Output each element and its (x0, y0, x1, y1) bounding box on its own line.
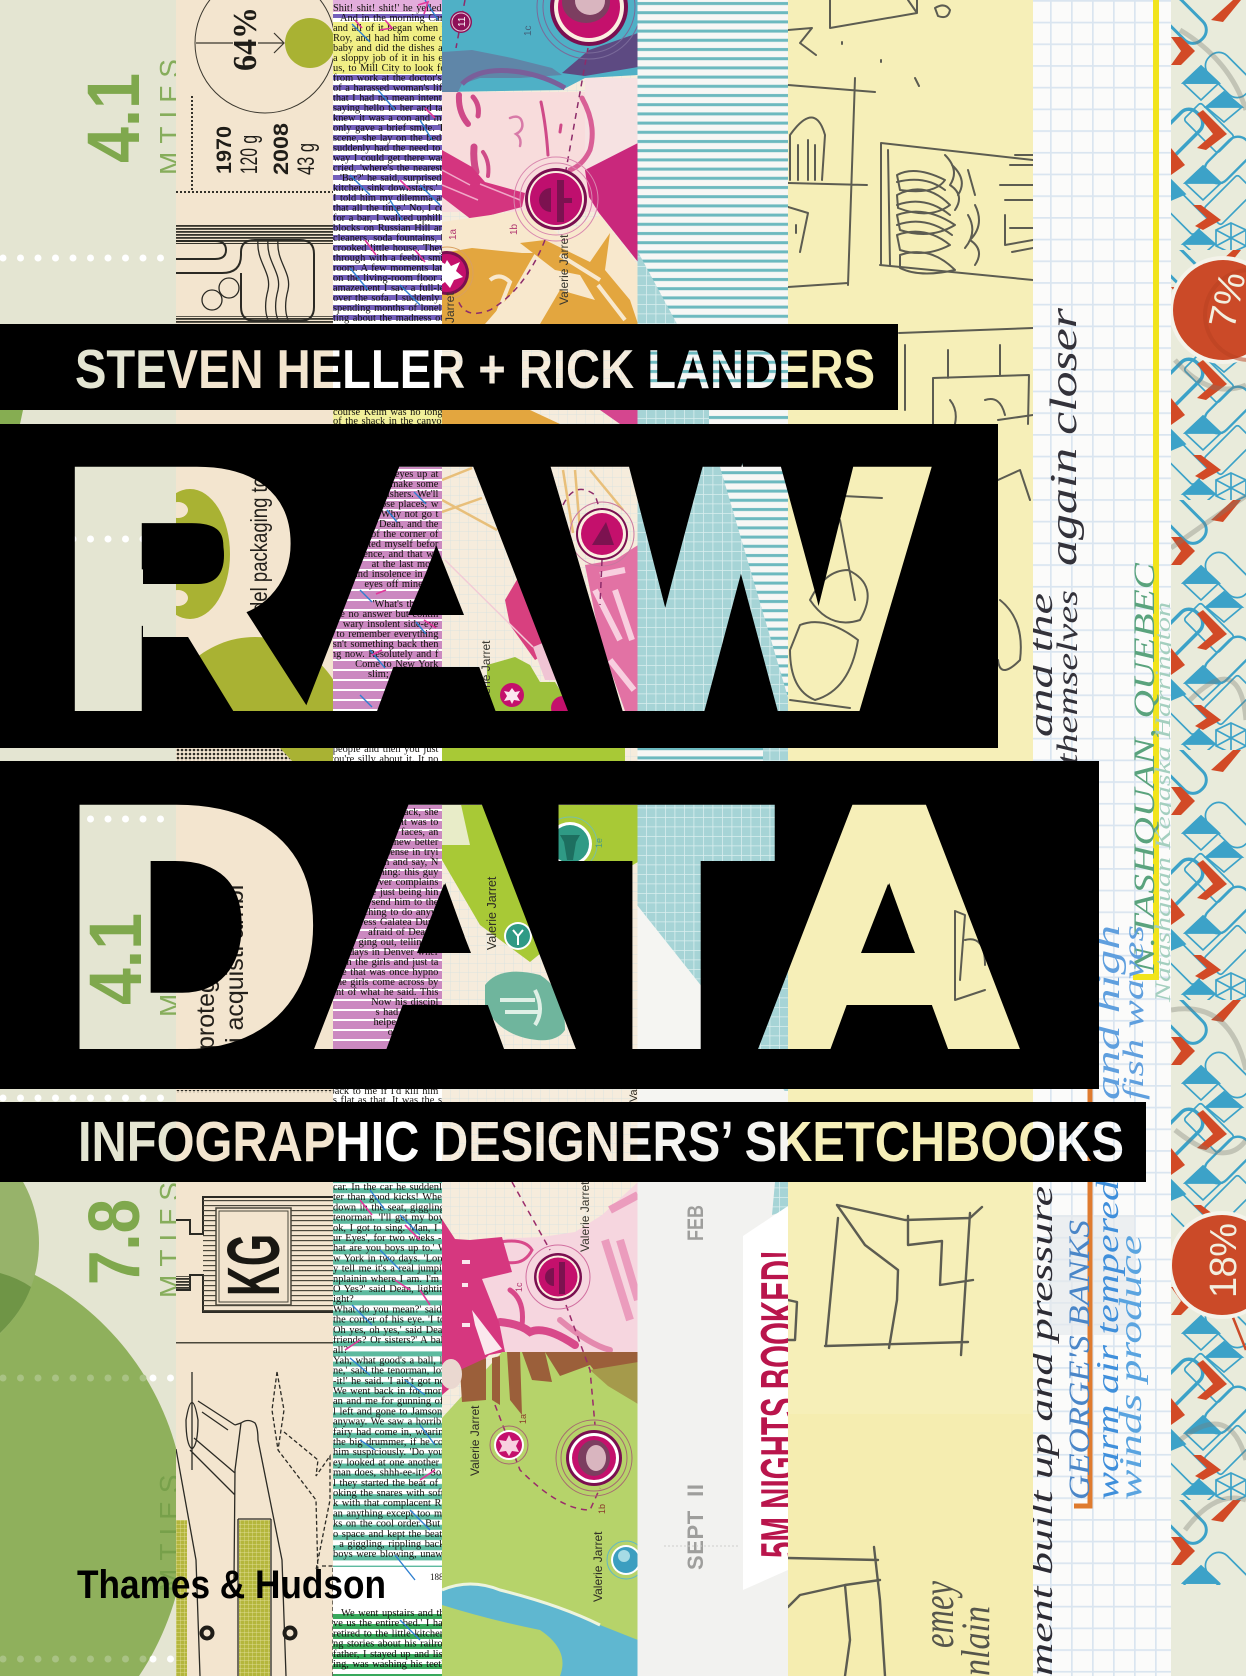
small labels top: 1b (509, 223, 520, 235)
shaded note patch (1049, 1215, 1135, 1335)
rotated label: FEB: FEB (683, 1205, 708, 1241)
chart: small green circle (0, 1182, 39, 1334)
highlights green (333, 1610, 442, 1676)
book text: top: saying hello to her and talkin (333, 103, 460, 114)
book text: middle: out of the corner of (354, 529, 439, 540)
book text: lower: k with that complacent Reich (333, 1498, 460, 1509)
book text: top: and all of it began when we d (333, 23, 463, 34)
book text: lower: Oh yes, oh yes,' said Dean. ' (333, 1325, 456, 1336)
illustration: striped book with glasses (176, 224, 333, 324)
book text: top: I told him my dilemma and h (333, 193, 461, 204)
book text: middle: send him to the (372, 897, 439, 908)
title line: DATA knock-out: A (321, 745, 570, 1109)
marker: small top-left: 11 (457, 16, 468, 27)
book text: middle: rlier days in Denver wher (328, 947, 439, 958)
grid wedge top (637, 250, 677, 324)
pencil sketch: lower plan (788, 1547, 885, 1676)
book text: top: scene, she lay on the bed sob (333, 133, 459, 144)
stat: 7.8: 7.8 (75, 1199, 155, 1285)
book text: middle: me back to me if I'd kill him (313, 1086, 438, 1097)
book text: lower: l left and gone to Jamson's N (333, 1406, 460, 1417)
book text: middle: ow you're g (388, 1027, 438, 1038)
RAW area: orange sketchy lines (442, 468, 623, 533)
book text: middle: wasn't something back then (321, 639, 439, 650)
book text: middle: watching to do anyw (349, 907, 439, 918)
panel: strip 8, isometric pattern with percent badges (1168, 0, 1246, 1676)
icon pattern field (1171, 0, 1246, 1585)
badge: 18 percent (1168, 1211, 1246, 1350)
book text: top: knew it was a con and maybe (333, 113, 462, 124)
small labels top: Valerie Jarret (557, 234, 571, 305)
book text: middle: Why not go t (381, 509, 439, 520)
book text: middle: ean and say, N (375, 857, 439, 868)
book text: top: from work at the doctor's off (333, 73, 458, 84)
labels lower: 1c (514, 1282, 524, 1292)
big olive circle (199, 637, 333, 761)
stat text: 1970 and 2008 weights: 43 g (293, 143, 320, 175)
book text: lower: ur Eyes', for two weeks - I d (333, 1233, 458, 1244)
book text: lower: ight? (333, 1294, 354, 1305)
DATA area: lime field (442, 805, 638, 962)
book text: middle: sense in tryi (386, 847, 438, 858)
portrait top: collar band (562, 33, 638, 76)
blue figure (442, 1584, 638, 1676)
chart: circle overlap (0, 1273, 31, 1333)
book text: middle: never complains (369, 877, 438, 888)
highlights magenta (333, 467, 442, 717)
book text: top: crooked little house. They wer (333, 243, 464, 254)
marker: starburst (421, 247, 473, 299)
portrait top: magenta shirt panel (585, 143, 638, 262)
panel: strip 2, beige technical drawings (176, 0, 333, 1676)
book text: top: us, to Mill City to look for R (333, 63, 460, 74)
second A counter (861, 884, 915, 953)
book text: top: baby and did the dishes and t (333, 43, 460, 54)
book text: lower: Yah, what good's a ball, life's (333, 1355, 459, 1366)
book text: middle: content of what he said. This (314, 987, 438, 998)
stat: 4.1 middle: 4.1 (74, 913, 157, 1005)
book text: top: And in the morning Camille (340, 13, 462, 24)
panel: strip 6, yellow sketchbook page (788, 0, 1033, 1676)
book text: middle: sence, and that wa (359, 549, 439, 560)
halftone band (176, 748, 292, 761)
portrait lower: olive shadow (590, 1362, 638, 1404)
highlights teal (333, 1182, 442, 1567)
book text: top: a sloppy job of it in his exci (333, 53, 456, 64)
dashed path lower (495, 1182, 600, 1510)
book text: top: blocks on Russian Hill and t (333, 223, 456, 234)
chart: big green circle (0, 1260, 186, 1676)
book text: middle: committed myself befor (337, 539, 439, 550)
book text: middle: s had him on t (376, 1007, 438, 1018)
book text: top: amazement I saw a full-lengt (333, 283, 458, 294)
pennant: 5M nights booked: 5M NIGHTS BOOKED! (751, 1250, 809, 1558)
stat label on circle: MTIES (154, 1466, 185, 1592)
book text: middle: I knew better (382, 837, 439, 848)
grid DATA (637, 761, 788, 1090)
book text: lower: w York in two days. 'Lord, (333, 1253, 448, 1264)
stat text: 1970 and 2008 weights: 120 g (236, 135, 263, 174)
book text: middle: I'll make some (376, 479, 439, 490)
book text: lower: down in the seat, giggling m (333, 1202, 456, 1213)
book text: middle: of people and then you just (321, 744, 438, 755)
portrait lower: lime field (442, 1352, 640, 1676)
book text: middle: slim; my, eyes y (368, 669, 439, 680)
portrait top: facial features (459, 95, 592, 176)
stat label top: MTIFS (154, 51, 185, 175)
handwriting: winds produce: winds produce (1112, 1235, 1148, 1500)
book text: top: for a bar, I walked uphill an (333, 213, 455, 224)
labels lower: 1a (518, 1414, 528, 1424)
book text: lower: We went upstairs and the (341, 1608, 450, 1619)
book text: top: of a harassed woman's life. I a (333, 83, 465, 94)
portrait lower: flower (440, 1359, 462, 1389)
marker: top large (537, 0, 641, 59)
book text: lower: y tell me it's a real jumpin t (333, 1264, 454, 1275)
white wedge DATA (637, 905, 788, 1182)
stat text: 1970 and 2008 weights (213, 123, 320, 175)
marker: blue lower (607, 1541, 645, 1579)
book text: middle: and insolence in his (353, 569, 438, 580)
orange marker line (1074, 1085, 1090, 1506)
title line: RAW knock-out: R (63, 407, 298, 771)
handwriting: themselves: themselves (1051, 590, 1084, 765)
gap colours at second bar (442, 410, 560, 424)
lower paper (637, 1182, 788, 1676)
book text: lower: l they started the beat of a (333, 1478, 447, 1489)
publisher: Thames & Hudson: Thames & Hudson (77, 1563, 386, 1607)
title line: RAW knock-out (0, 407, 998, 771)
pencil scribbles: box (897, 155, 1033, 274)
panel: strip 4, colour-tinted portrait collage: 1e (594, 838, 604, 848)
book text: lower: hat are you boys up to.' We (333, 1243, 452, 1254)
book text: lower: ng stories about his railroadin (333, 1639, 461, 1650)
book text: lower: -it!' he said. 'I ain't got no mon (333, 1376, 468, 1387)
marker: magenta rifle (514, 157, 598, 241)
rotated text: packaging: del packaging to (246, 477, 272, 612)
book text: lower: ks on the cool order. But he d (333, 1519, 463, 1530)
portrait lower: facial shading (500, 1241, 610, 1350)
handwriting: and the: and the (1023, 593, 1060, 737)
title line: DATA knock-out: D (67, 745, 317, 1109)
book text: middle: tried to remember everything (314, 629, 438, 640)
book text: top: only gave a brief smile. Ta th (333, 123, 461, 134)
marker: starburst lower (490, 1426, 528, 1464)
book text: middle: ress Galatea Dunk (360, 917, 439, 928)
book text: lower: him suspiciously. 'Do you blo (333, 1447, 460, 1458)
handwriting: plain: nlain (953, 1606, 998, 1676)
labels lower: 1b (597, 1504, 607, 1514)
book text: lower: We went back in for more. Th (333, 1386, 464, 1397)
handwriting: again closer: again closer (1043, 308, 1085, 566)
RAW area: white streak (445, 560, 533, 647)
small labels top: Jarret (443, 292, 457, 323)
author bar: Steven Heller + Rick Landers: STEVEN HELLER + RICK LANDERS (75, 338, 875, 400)
title line: RAW knock-out: A (311, 407, 562, 771)
beige cover below olive circle (202, 806, 258, 823)
faded dotted lines on circle (3, 1378, 150, 1659)
DATA area: small teal marker (504, 922, 532, 950)
book text: top: of the shack in the canyon (333, 416, 448, 427)
panel: strip 4, colour-tinted portrait collage (421, 0, 645, 1676)
book text: top: suddenly had the need to go (333, 143, 454, 154)
book text: middle: eyes off mine for (364, 579, 439, 590)
book text: middle: afraid of Dean a (368, 927, 439, 938)
stat label lower: MTIFS (154, 1174, 185, 1298)
DATA area: teal marker (543, 817, 597, 871)
R lower bowl (143, 618, 214, 637)
first A counter (417, 884, 471, 953)
book text: middle: take the girls come across by (313, 977, 439, 988)
A crossbar (385, 648, 489, 667)
pencil sketch: floor plan (788, 1205, 982, 1355)
book text: top: Shit! shit! shit!' he yelled. (333, 3, 444, 14)
book text: middle: thing: this guy (376, 867, 439, 878)
book text: middle: it was to (401, 817, 438, 828)
portrait lower: collar shading (605, 1195, 638, 1320)
book text: lower: oking the snares with soft go (333, 1488, 458, 1499)
stripes field (637, 0, 788, 1182)
book text: lower: ne,' said the tenorman, loweri (333, 1366, 460, 1377)
green bit in gap (0, 410, 23, 424)
book text: lower: ve us the entire bed.' I have (333, 1618, 453, 1629)
badge: 18 percent: 18% (1203, 1223, 1245, 1298)
labels lower (468, 1181, 607, 1602)
handwriting: and high: and high (1090, 925, 1127, 1100)
book text: top: kitchen sink downstairs.' He (333, 183, 454, 194)
chart: circle 64 percent (195, 0, 335, 113)
pencil sketches: DATA letters (955, 911, 985, 1000)
book text: middle: eyes up at (395, 469, 438, 480)
book text: lower: an anything except too much (333, 1508, 458, 1519)
first A crossbar (393, 986, 497, 1005)
rotated text: acquisti: ti acquisti ambi (221, 885, 249, 1050)
pencil sketches: RAW letters (790, 415, 1033, 708)
rotated label: SEPT II: SEPT II (683, 1484, 708, 1570)
illustration: airplane line drawing (176, 1372, 333, 1676)
Valerie label in RAW: Valerie Jarret (479, 640, 493, 711)
RAW area: magenta marker (570, 502, 634, 566)
book text: middle: 'What's the mat (373, 599, 438, 610)
stat: 4.1 top: 4.1 (72, 73, 155, 163)
book text: lower: an and me for gunning off a (333, 1396, 455, 1407)
olive shape inside R bowl (176, 489, 230, 619)
badge: 7 percent (1169, 256, 1246, 364)
panel: strip 5, teal stripes and grid (637, 0, 809, 1676)
handwriting: N. Tashquan, Quebec: N.TASHQUAN, QUEBEC (1128, 562, 1161, 974)
book text: lower: the corner of his eye. 'I tole yo (333, 1315, 467, 1326)
book text: top: that all the time.' No, I could (333, 203, 459, 214)
book text: middle: made no answer but contin (322, 609, 439, 620)
dotted rules (176, 96, 333, 192)
book text: lower: all? (333, 1345, 348, 1356)
book text: middle: ging out, telling hi (359, 937, 438, 948)
stat text: 1970 and 2008 weights: 1970 (213, 126, 236, 174)
book text: middle: ly faces, an (389, 827, 439, 838)
small labels top: 1c (523, 25, 534, 36)
chart: circle 64 percent: 64% (227, 7, 264, 71)
marker: magenta lower (526, 1245, 590, 1309)
handwriting: warm air tempered: warm air tempered (1089, 1179, 1125, 1500)
book text: lower: man does, shhh-ee-it!' So th (333, 1468, 454, 1479)
dotted white lines (3, 258, 176, 1659)
book text: lower: What do you mean?' said the (333, 1304, 458, 1315)
book text: top: that I had no mean intention (333, 93, 456, 104)
book text: lower: 188 (430, 1572, 444, 1582)
book text: middle: rough me; It (385, 689, 438, 700)
book text: middle: it as flat as that. It was the s (319, 1095, 442, 1106)
small labels top (443, 25, 571, 323)
handwriting: emery: emey (914, 1581, 963, 1648)
panel: strip 1, pale green chart page (0, 0, 186, 1676)
book text: top: Roy, and had him come over, (333, 33, 460, 44)
A counter (408, 547, 464, 615)
portrait lower: magenta hair and belt (442, 1219, 512, 1395)
book text: lower: father, I stayed up and listen (333, 1649, 456, 1660)
labels lower: Valerie Jarret (591, 1531, 605, 1602)
RAW area: pale pink bloom (533, 640, 565, 680)
book text: middle: publishers. We'll (368, 489, 438, 500)
book text: lower: nplainin where I am. I'm marrie (333, 1274, 470, 1285)
book text: top: way I could get there was th (333, 153, 457, 164)
labels lower: Valerie Jarret (578, 1181, 592, 1252)
Valerie label in DATA: Valerie Jarret (485, 876, 499, 950)
RAW area: lime fragment (487, 657, 573, 711)
book text: middle: those places; w (373, 499, 439, 510)
book text: lower: , a giggling, rippling backgrou (333, 1539, 464, 1550)
marker: small top-left (450, 11, 472, 33)
portrait top: cream shirt base (442, 210, 638, 324)
rotated text: proteggono: proteggono (192, 923, 220, 1050)
book text: lower: fairy had come in, wearing a (333, 1427, 457, 1438)
marker: portrait lower (556, 1420, 632, 1496)
book text: top: course Kelm was no longer (333, 407, 451, 418)
grid gap (637, 410, 709, 424)
book text: lower: tenorman. 'I'll get my boy t (333, 1213, 450, 1224)
book text: middle: time just being hin (358, 887, 439, 898)
grid RAW (637, 424, 792, 761)
handwriting: built up and pressure: ment built up and pressure (1023, 1186, 1059, 1676)
book text: top: cried, 'where's the nearest bar? (333, 163, 464, 174)
yellow marker line (1133, 0, 1156, 977)
book text: middle: but you're silly about it. It no (312, 754, 438, 765)
rule (176, 1342, 333, 1344)
dashed path top (456, 0, 588, 313)
book text: middle: said Dean, and the (359, 519, 439, 530)
title line: RAW knock-out: W (565, 407, 921, 771)
portrait top: teal field (442, 0, 638, 92)
book text: lower: ok, I got to sing. Man, I live (333, 1223, 457, 1234)
book text: top: cleaners, soda fountains, bea (333, 233, 456, 244)
pennant: 5M nights booked (743, 1206, 809, 1590)
portrait lower: brown overlap streaks (460, 1352, 638, 1415)
book text: lower: anyway. We saw a horrible (333, 1417, 449, 1428)
RAW area: pink blob left (505, 578, 552, 660)
book text: top: over the sofa. I suddenly real (333, 293, 459, 304)
halftone hairline (176, 1090, 333, 1093)
pencil sketches: upper (788, 0, 1033, 287)
labels lower: Valerie Jarret (468, 1405, 482, 1476)
portrait top: orange shirt (442, 248, 535, 324)
RAW area: pink portrait right (585, 545, 638, 711)
illustration: KG weight tag: KG (212, 1234, 295, 1296)
book text: lower: boys were blowing, unaware (333, 1549, 456, 1560)
halftone on D (250, 805, 300, 817)
title line: DATA knock-out: T (565, 744, 768, 1108)
book text: middle: he stared at (389, 679, 439, 690)
portrait top: magenta hair (442, 150, 525, 220)
second A crossbar (837, 986, 941, 1005)
faint dotted rule (664, 1545, 740, 1547)
stat text: 1970 and 2008 weights: 2008 (270, 123, 293, 175)
portrait lower: white strap (472, 1310, 502, 1355)
title line: DATA knock-out: A (765, 745, 1014, 1109)
stat label middle: MTIFS (154, 893, 185, 1017)
handwriting: George's Banks: GEORGE'S BANKS (1063, 1220, 1096, 1500)
book text: lower: O Yes?' said Dean, lighting u (333, 1284, 459, 1295)
handwriting: second faint note: Natashquan Kegaska Harrington (1150, 602, 1175, 1003)
book text: top: spending months of loneliness (333, 303, 462, 314)
book text: top: 'Bar?' he said, surprised. I (340, 173, 452, 184)
book text: top: through with a feeble smile (333, 253, 451, 264)
portrait top: hair (442, 50, 562, 92)
small labels top: 1a (448, 228, 459, 240)
title line: DATA knock-out (0, 744, 1099, 1109)
book text: lower: the big drummer, if he could (333, 1437, 457, 1448)
illustration: KG weight tag (176, 1197, 340, 1312)
DATA area: green tinted face (485, 972, 565, 1040)
book text: top: room. A few moments later Ga (333, 263, 467, 274)
DATA gap: Va (628, 1088, 640, 1102)
pen marks (350, 0, 440, 1640)
portrait top: face shading (442, 92, 638, 212)
book text: lower: car. In the car he suddenly, y (333, 1182, 459, 1193)
book text: middle: nothing now. Resolutely and f (310, 649, 439, 660)
book text: lower: ing, was washing his teeth a (333, 1659, 455, 1670)
book text: lower: ter than good kicks! Where (333, 1192, 450, 1203)
book text: middle: back, she (399, 807, 439, 818)
pencil sketches: under title (899, 328, 1033, 424)
author bar: Steven Heller + Rick Landers (0, 324, 898, 410)
book text: middle: Come to New York (355, 659, 439, 670)
book text: middle: then. (418, 589, 438, 600)
book text: lower: ey looked at one another and (333, 1457, 459, 1468)
book text: lower: friends? Or sisters?' A ball, y (333, 1335, 458, 1346)
book text: lower: retired to the little kitchenett (333, 1628, 455, 1639)
subtitle bar: Infographic Designers' Sketchbooks (0, 1102, 1146, 1182)
panel: strip 7, blue graph paper with handwriting (1023, 0, 1175, 1676)
book text: middle: at the last mom (372, 559, 438, 570)
book text: top: ting about the madness of th (333, 313, 456, 324)
R counter (143, 526, 224, 584)
highlights top (333, 0, 442, 12)
book text: lower: o space and kept the beat, th (333, 1529, 457, 1540)
book text: middle: Now his discipl (371, 997, 439, 1008)
smudged pencil arcs (1171, 30, 1246, 1530)
book text: middle: wary insolent side-eye (343, 619, 439, 630)
panel: strip 3, highlighted book text (333, 0, 442, 1676)
portrait lower: light pink face (470, 1182, 638, 1352)
book text: top: on the living-room floor an (333, 273, 451, 284)
book text: middle: with the girls and just ta (333, 957, 439, 968)
gap lime (442, 748, 625, 761)
book text: middle: voice that was once hypno (324, 967, 438, 978)
handwriting: fish waves: fish waves (1117, 925, 1150, 1100)
book text: middle: helped bring in (373, 1017, 439, 1028)
